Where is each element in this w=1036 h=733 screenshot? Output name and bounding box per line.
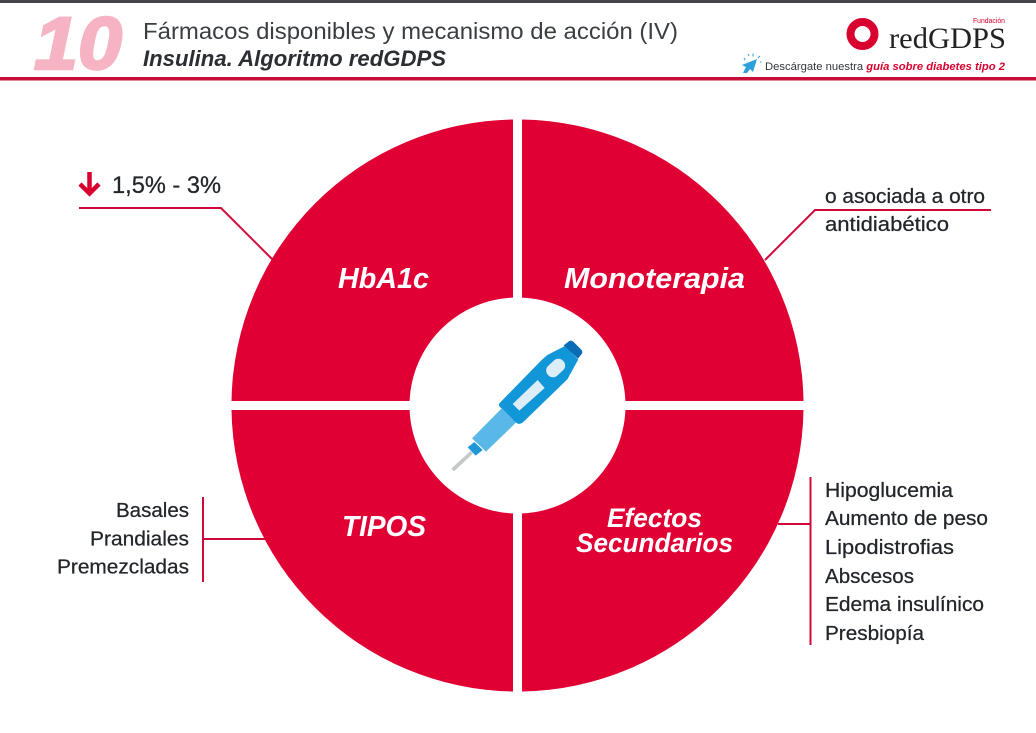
callout text line 1: o asociada a otro bbox=[825, 186, 985, 208]
label: Efectos: Efectos bbox=[607, 503, 702, 533]
side effects list: Abscesos bbox=[825, 566, 914, 588]
pen button bbox=[544, 356, 568, 380]
label: Secundarios: Secundarios bbox=[576, 528, 733, 558]
pen cap bbox=[564, 341, 582, 359]
leader line bbox=[765, 210, 991, 260]
header rule bbox=[0, 77, 1036, 80]
icon: download cursor bbox=[742, 54, 762, 73]
panel: Efectos Secundarios bbox=[522, 410, 804, 692]
callout: monotherapy bbox=[765, 186, 991, 260]
pen body bbox=[499, 346, 578, 424]
panel: Monoterapia bbox=[522, 120, 804, 401]
side effects list: Aumento de peso bbox=[825, 508, 988, 530]
callout: HbA1c reduction bbox=[79, 172, 273, 260]
pen needle bbox=[453, 452, 472, 470]
pen hub bbox=[468, 442, 483, 456]
callout: side effects bbox=[778, 477, 988, 645]
side effects list bbox=[825, 480, 988, 645]
leader line bbox=[79, 208, 273, 260]
logo wordmark: redGDPS bbox=[889, 22, 1006, 55]
type list: Premezcladas bbox=[57, 556, 189, 578]
pen window bbox=[513, 380, 545, 411]
callout text: 1,5% - 3% bbox=[112, 172, 221, 199]
icon: down arrow bbox=[80, 172, 99, 194]
icon: insulin pen bbox=[453, 341, 582, 470]
side effects list: Presbiopía bbox=[825, 623, 925, 645]
type list bbox=[57, 500, 189, 578]
logo foundation label: Fundación bbox=[973, 18, 1005, 25]
side effects list: Lipodistrofias bbox=[825, 537, 954, 559]
type list: Prandiales bbox=[90, 528, 189, 550]
title: Fármacos disponibles y mecanismo de acción (IV) bbox=[143, 18, 678, 44]
bracket bbox=[203, 497, 266, 582]
logo: redGDPS bbox=[850, 18, 1006, 55]
chapter number: 10 bbox=[34, 2, 122, 85]
type list: Basales bbox=[116, 500, 189, 522]
label: TIPOS: TIPOS bbox=[342, 511, 427, 543]
panel: Tipos bbox=[232, 410, 513, 692]
download note: Descárgate nuestra guía sobre diabetes tipo 2 bbox=[765, 61, 1005, 73]
subtitle: Insulina. Algoritmo redGDPS bbox=[143, 46, 446, 71]
side effects list: Hipoglucemia bbox=[825, 480, 954, 502]
logo ring bbox=[850, 22, 874, 46]
callout: types bbox=[57, 497, 266, 582]
top dark bar bbox=[0, 0, 1036, 3]
bracket bbox=[778, 477, 810, 645]
label: HbA1c: HbA1c bbox=[338, 263, 429, 295]
donut chart bbox=[232, 120, 804, 692]
side effects list: Edema insulínico bbox=[825, 594, 984, 616]
label: Monoterapia: Monoterapia bbox=[564, 263, 745, 295]
panel: HbA1c bbox=[232, 120, 513, 401]
pen cartridge bbox=[472, 408, 516, 452]
callout text line 2: antidiabético bbox=[825, 214, 949, 236]
